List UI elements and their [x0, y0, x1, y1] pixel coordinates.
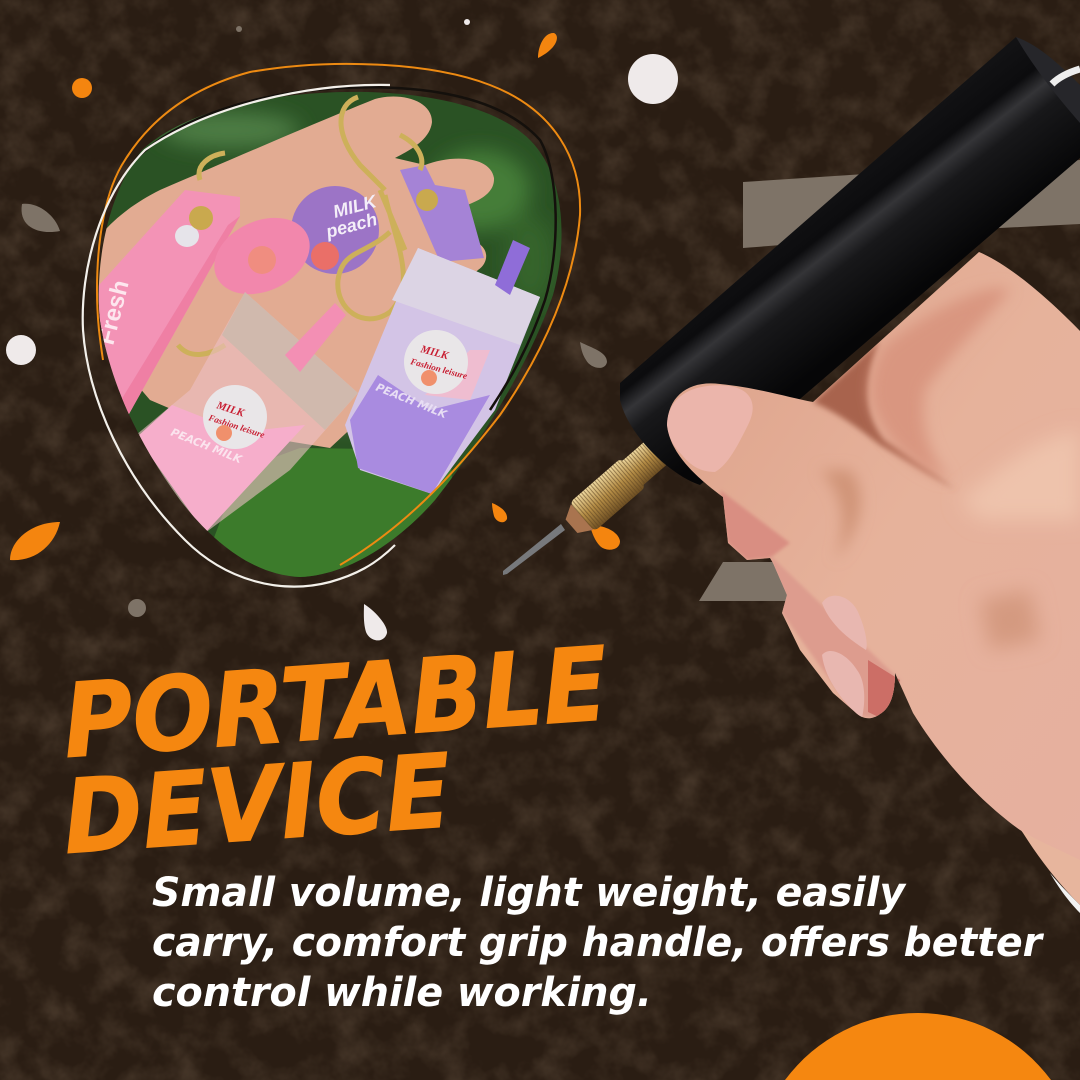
photo round tags [291, 186, 379, 274]
photo pink cup: MILK [214, 399, 246, 420]
drill [503, 37, 1080, 575]
photo: keychains held in hand: MILK [331, 191, 380, 222]
title: PORTABLE [59, 625, 611, 782]
photo purple cup: PEACH MILK [374, 381, 450, 422]
photo: keychains held in hand: Fresh [93, 278, 135, 347]
photo outline: orange stroke [97, 64, 580, 565]
photo foliage [160, 112, 555, 600]
body text: carry, comfort grip handle, offers better [152, 920, 1044, 966]
drill barrel [620, 37, 1080, 485]
orange semicircle [785, 1013, 1051, 1080]
photo pink cup [130, 292, 358, 533]
photo gold clasp [178, 97, 422, 354]
photo pink strap [98, 190, 240, 414]
title: DEVICE [59, 732, 455, 878]
photo purple cup: Fashion leisure [409, 356, 468, 381]
body text [152, 870, 1044, 1016]
photo purple cup [345, 240, 540, 494]
body text: control while working. [152, 970, 652, 1016]
photo hand [90, 97, 494, 448]
hand finger shadows [720, 288, 1080, 720]
photo: keychains held in hand: peach [323, 209, 379, 242]
title [59, 625, 611, 878]
hand holding the drill [667, 252, 1080, 860]
photo outline: black stroke [135, 87, 556, 410]
decorative dots and drops [6, 19, 678, 640]
hand thumb nail [667, 385, 753, 472]
photo pink cup: PEACH MILK [169, 426, 245, 467]
photo pink cup: Fashion leisure [206, 412, 266, 440]
hand lower finger 1 [720, 490, 790, 560]
photo: keychains held in hand [98, 92, 562, 577]
drill bit [503, 524, 565, 575]
photo purple cup: MILK [418, 343, 450, 362]
body text: Small volume, light weight, easily [152, 870, 907, 916]
hand nails [822, 596, 867, 650]
photo outline: white stroke [83, 85, 395, 587]
hand lower finger 2 [770, 555, 900, 720]
wrist and sleeve [1015, 822, 1080, 913]
USB cable [1052, 69, 1080, 84]
decorative taupe bars behind the hand [699, 160, 1080, 601]
drill brass neck and chuck [559, 436, 672, 541]
drill end cap [1016, 37, 1080, 123]
